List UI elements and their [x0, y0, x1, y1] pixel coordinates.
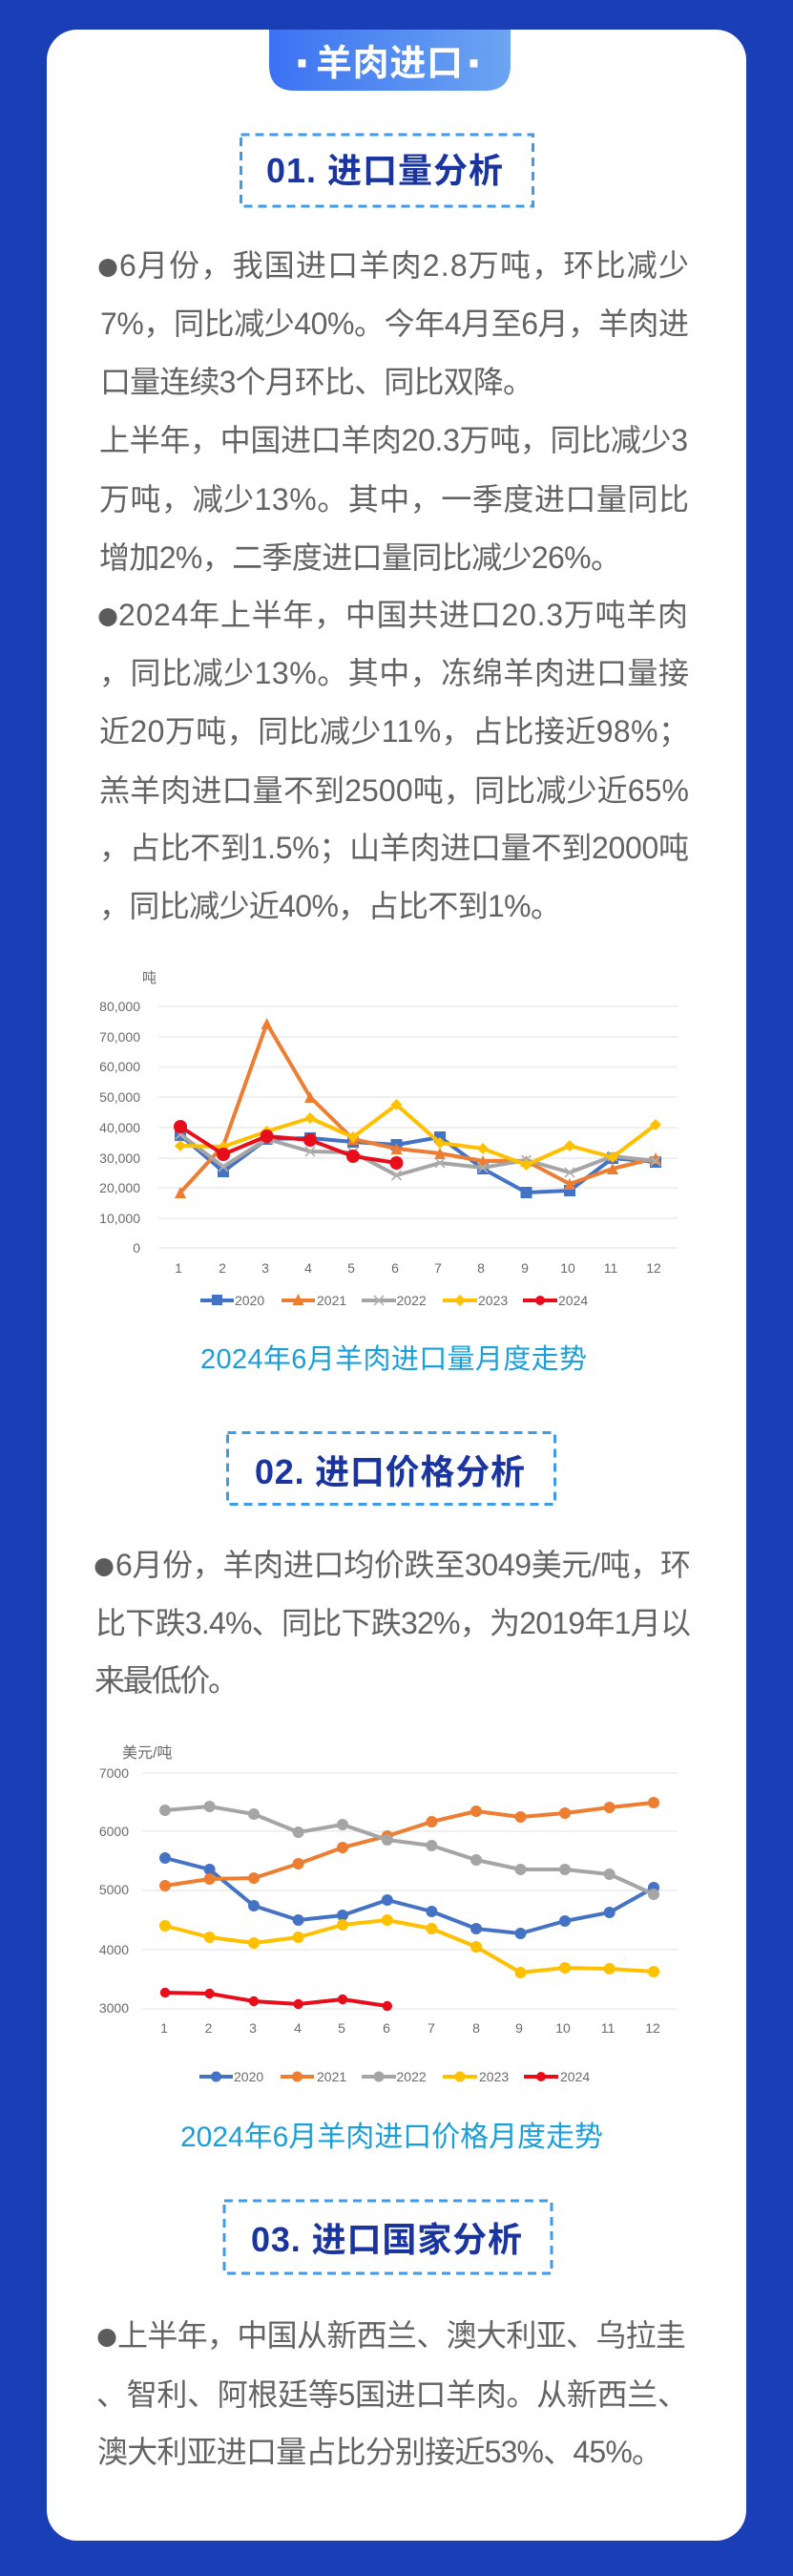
series 2023	[165, 1920, 654, 1973]
text block: import volume analysis: 万吨，减少13%。其中，一季度进口量同比	[99, 482, 689, 517]
series 2023	[180, 1105, 656, 1165]
x axis labels: 11	[604, 1260, 617, 1276]
series 2022	[180, 1134, 656, 1175]
text block: import volume analysis: 口量连续3个月环比、同比双降。	[100, 365, 533, 399]
series 2024	[165, 1993, 387, 2006]
line chart: monthly import price	[99, 1744, 678, 2084]
x axis labels: 4	[294, 2020, 302, 2036]
series 2020	[165, 1858, 654, 1933]
x axis labels: 9	[521, 1260, 529, 1276]
y axis labels: 60,000	[99, 1059, 140, 1074]
text block: import price analysis: 6月份，羊肉进口均价跌至3049美元/吨，环	[115, 1548, 691, 1582]
x axis labels: 8	[472, 2020, 480, 2036]
y axis labels	[99, 1765, 129, 2016]
x axis labels: 12	[646, 1260, 661, 1276]
series 2020	[180, 1135, 656, 1193]
x axis labels: 6	[383, 2020, 390, 2036]
legend: 2021	[317, 1293, 346, 1308]
legend: 2022	[397, 1293, 427, 1308]
y axis labels: 6000	[99, 1824, 129, 1839]
y axis labels: 4000	[99, 1942, 129, 1957]
x axis labels: 9	[515, 2020, 523, 2036]
legend: 2020	[234, 2069, 263, 2084]
x axis labels: 2	[219, 1260, 226, 1276]
legend	[200, 1293, 588, 1308]
x axis labels	[175, 1260, 661, 1276]
x axis labels: 7	[434, 1260, 442, 1276]
text block: import volume analysis: ，同比减少近40%，占比不到1%。	[99, 889, 561, 923]
y axis labels: 3000	[99, 2000, 129, 2016]
text block: source countries: 、智利、阿根廷等5国进口羊肉。从新西兰、	[96, 2377, 688, 2412]
legend: 2020	[235, 1293, 264, 1308]
y axis labels: 30,000	[99, 1151, 140, 1166]
x axis labels: 1	[175, 1260, 182, 1276]
text block: source countries	[96, 2318, 688, 2469]
y axis labels: 0	[133, 1240, 140, 1256]
y axis labels: 7000	[99, 1765, 129, 1781]
x axis labels: 12	[645, 2020, 660, 2036]
text block: import price analysis: ●	[94, 1552, 115, 1579]
text block: import volume analysis: ，同比减少13%。其中，冻绵羊肉进口量接	[99, 656, 689, 690]
chart caption: volume: 2024年6月羊肉进口量月度走势	[200, 1343, 587, 1375]
series 2021	[180, 1024, 656, 1193]
legend: 2021	[317, 2069, 346, 2084]
heading: 02 进口价格分析: 02. 进口价格分析	[255, 1452, 525, 1491]
x axis labels: 1	[160, 2020, 168, 2036]
x axis labels: 5	[338, 2020, 345, 2036]
y axis labels: 5000	[99, 1882, 129, 1897]
title tab: 羊肉进口	[269, 30, 511, 93]
text block: import volume analysis	[97, 248, 689, 923]
x axis labels: 3	[249, 2020, 257, 2036]
text block: import price analysis: 比下跌3.4%、同比下跌32%，为2019年1月以	[95, 1606, 691, 1640]
x axis labels	[160, 2020, 660, 2036]
text block: import volume analysis: 6月份，我国进口羊肉2.8万吨，环比减少	[119, 248, 689, 283]
x axis labels: 10	[560, 1260, 575, 1276]
text block: import volume analysis: 近20万吨，同比减少11%，占比接近98%；	[99, 714, 689, 749]
text block: source countries: ●	[96, 2322, 117, 2350]
y axis labels: 20,000	[99, 1180, 140, 1195]
heading: 03 进口国家分析	[224, 2201, 552, 2273]
text block: import volume analysis: 增加2%，二季度进口量同比减少26%。	[99, 540, 621, 575]
legend: 2022	[397, 2069, 427, 2084]
series 2024	[180, 1127, 397, 1163]
series 2021	[165, 1803, 654, 1886]
title tab: 羊肉进口: ·	[467, 32, 484, 93]
text block: import price analysis: 来最低价。	[94, 1663, 239, 1698]
text block: import volume analysis: 上半年，中国进口羊肉20.3万吨，同比减少3	[99, 423, 688, 457]
series 2022	[165, 1806, 654, 1894]
text block: import volume analysis: ●	[97, 602, 118, 629]
line chart: monthly import price: 美元/吨	[122, 1744, 172, 1762]
legend: 2024	[558, 1293, 588, 1308]
line chart: monthly import volume	[99, 970, 678, 1308]
text block: source countries: 上半年，中国从新西兰、澳大利亚、乌拉圭	[117, 2318, 686, 2353]
x axis labels: 10	[555, 2020, 571, 2036]
legend: 2023	[479, 2069, 509, 2084]
title tab: 羊肉进口: 羊肉进口	[316, 44, 463, 84]
title tab: 羊肉进口: ·	[295, 32, 312, 93]
x axis labels: 6	[391, 1260, 399, 1276]
x axis labels: 2	[205, 2020, 213, 2036]
y axis labels	[99, 999, 140, 1256]
x axis labels: 8	[477, 1260, 485, 1276]
x axis labels: 11	[601, 2020, 615, 2036]
heading: 02 进口价格分析	[227, 1432, 555, 1505]
x axis labels: 7	[428, 2020, 435, 2036]
text block: import volume analysis: 羔羊肉进口量不到2500吨，同比减少近65%	[99, 773, 689, 808]
text block: import volume analysis: 7%，同比减少40%。今年4月至6月，羊肉进	[100, 306, 689, 341]
text block: import volume analysis: 2024年上半年，中国共进口20.3万吨羊肉	[118, 598, 688, 632]
x axis labels: 5	[347, 1260, 355, 1276]
text block: source countries: 澳大利亚进口量占比分别接近53%、45%。	[97, 2435, 662, 2469]
text block: import price analysis	[94, 1548, 691, 1698]
heading: 01 进口量分析	[240, 135, 532, 206]
x axis labels: 3	[261, 1260, 269, 1276]
heading: 03 进口国家分析: 03. 进口国家分析	[251, 2220, 522, 2259]
y axis labels: 50,000	[99, 1089, 140, 1105]
legend: 2023	[478, 1293, 508, 1308]
heading: 01 进口量分析: 01. 进口量分析	[266, 151, 503, 190]
line chart: monthly import volume: 吨	[142, 970, 157, 986]
text block: import volume analysis: ，占比不到1.5%；山羊肉进口量不到2000吨	[99, 831, 689, 865]
legend	[199, 2069, 590, 2084]
text block: import volume analysis: ●	[97, 252, 118, 280]
y axis labels: 10,000	[99, 1211, 140, 1226]
y axis labels: 80,000	[99, 999, 140, 1014]
legend: 2024	[560, 2069, 590, 2084]
y axis labels: 70,000	[99, 1029, 140, 1045]
y axis labels: 40,000	[99, 1120, 140, 1135]
x axis labels: 4	[304, 1260, 312, 1276]
chart caption: price: 2024年6月羊肉进口价格月度走势	[180, 2122, 603, 2153]
